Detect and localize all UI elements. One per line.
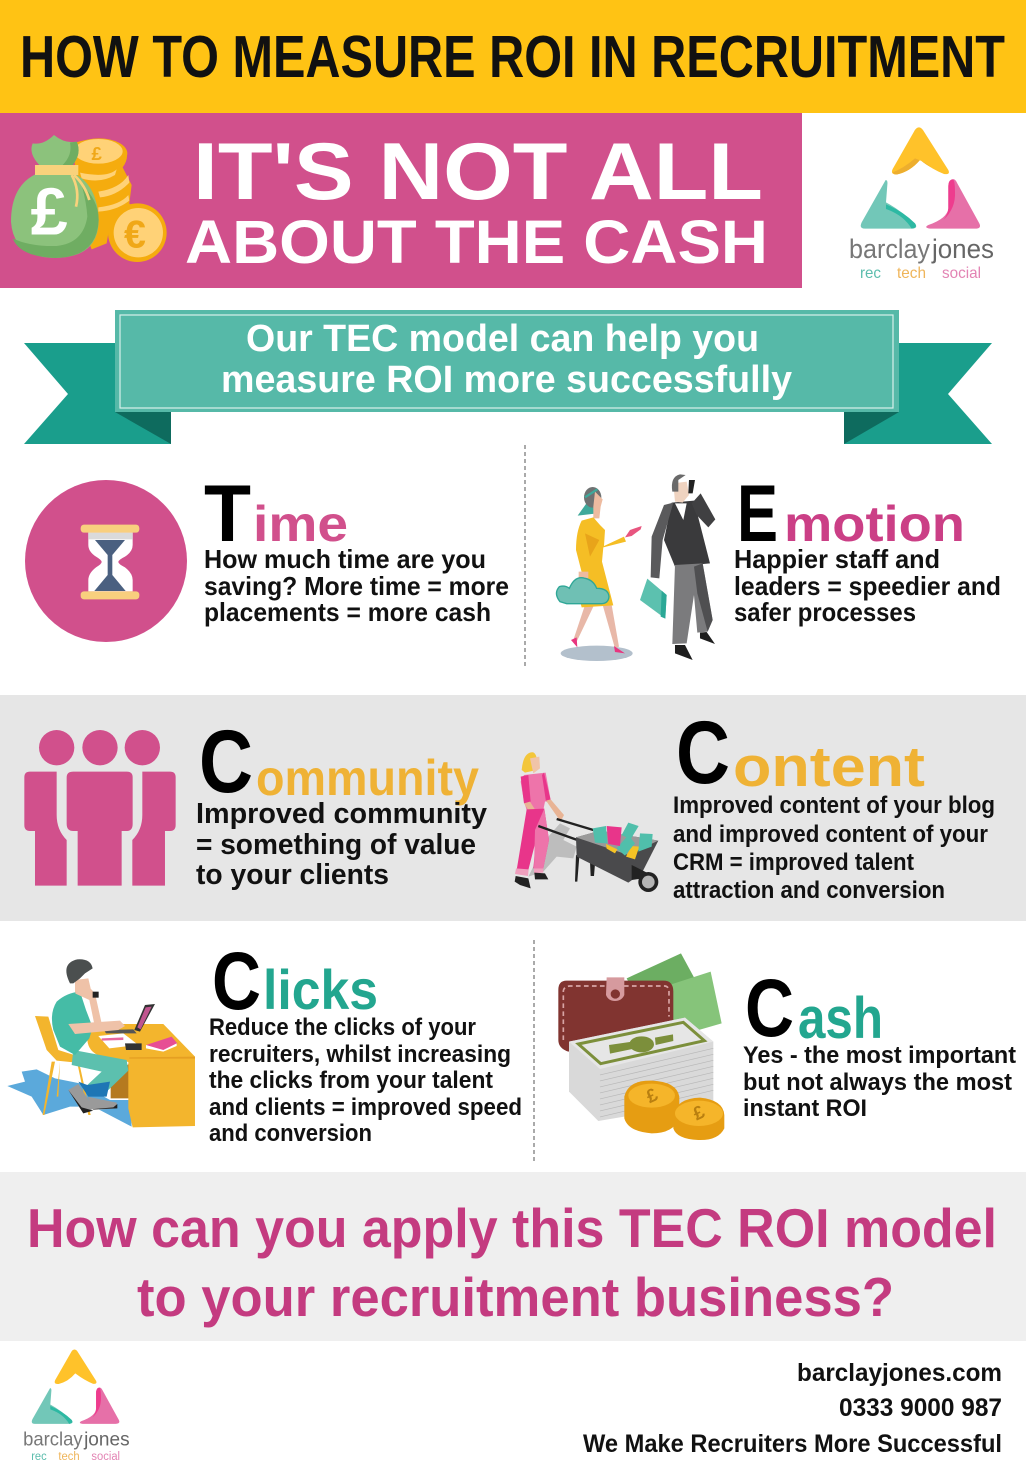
heading: clicks: licks — [263, 958, 378, 1021]
footer logo wordmark: jones — [83, 1428, 130, 1450]
footer contact details: barclayjones.com — [797, 1359, 1002, 1387]
icon: money bag and coins: € — [124, 212, 146, 256]
text: content: and improved content of your — [673, 821, 988, 848]
text: community: to your clients — [196, 859, 389, 891]
text: content: CRM = improved talent — [673, 849, 914, 876]
text: time: placements = more cash — [204, 597, 491, 627]
banner text: measure ROI more successfully — [221, 359, 792, 401]
logo wordmark: social — [942, 265, 981, 282]
text: cash — [743, 1042, 1016, 1122]
icon: hourglass — [25, 480, 187, 642]
heading: time — [204, 469, 348, 559]
footer contact details: 0333 9000 987 — [839, 1394, 1002, 1422]
call to action text: How can you apply this TEC ROI model — [27, 1197, 997, 1259]
panel: grey band — [0, 695, 1026, 921]
text: community: = something of value — [196, 829, 476, 861]
heading: emotion: motion — [784, 496, 965, 552]
panel: call to action — [0, 1172, 1026, 1341]
heading: community: ommunity — [256, 750, 479, 806]
text: clicks: Reduce the clicks of your — [209, 1014, 476, 1041]
heading: content: ontent — [733, 735, 925, 799]
text: content — [673, 792, 995, 904]
text: clicks: and clients = improved speed — [209, 1094, 522, 1121]
illustration: wallet, banknotes and coins: £ — [689, 1101, 708, 1124]
text: time — [204, 544, 509, 627]
footer logo wordmark — [23, 1428, 130, 1463]
logo wordmark: barclay — [849, 234, 930, 264]
text: time: How much time are you — [204, 544, 486, 574]
text: content: Improved content of your blog — [673, 792, 995, 819]
banner: TEC model ribbon — [24, 310, 992, 444]
illustration: wallet, banknotes and coins: £ — [643, 1083, 661, 1107]
footer logo wordmark: rec — [31, 1450, 47, 1463]
panel: community — [24, 711, 487, 891]
footer logo wordmark: barclay — [23, 1428, 83, 1450]
text: clicks: the clicks from your talent — [209, 1067, 493, 1094]
text: time: saving? More time = more — [204, 571, 509, 601]
text: clicks: recruiters, whilst increasing — [209, 1041, 511, 1068]
footer logo wordmark: social — [91, 1450, 120, 1463]
call to action text — [27, 1197, 997, 1328]
logo wordmark: tech — [897, 265, 926, 282]
heading: community: C — [199, 711, 253, 811]
heading: community — [199, 711, 479, 811]
text: emotion — [734, 544, 1001, 627]
panel: headline banner — [0, 113, 802, 288]
headline line 2: ABOUT THE CASH — [185, 208, 768, 276]
icon: three people — [24, 730, 176, 886]
footer contact details — [583, 1359, 1002, 1458]
text: emotion: leaders = speedier and — [734, 571, 1001, 601]
panel: cash — [558, 953, 1016, 1140]
panel: clicks — [7, 936, 522, 1147]
heading: clicks: C — [212, 936, 261, 1027]
heading: emotion: E — [737, 469, 778, 559]
logo: barclayjones footer — [23, 1349, 130, 1463]
heading: emotion — [737, 469, 965, 559]
heading: content — [676, 702, 925, 802]
panel: title bar — [0, 0, 1026, 113]
text: content: attraction and conversion — [673, 877, 945, 904]
illustration: wallet, banknotes and coins — [558, 953, 724, 1140]
panel: time — [25, 469, 509, 642]
banner text — [221, 318, 792, 401]
icon: money bag and coins: £ — [31, 176, 68, 250]
heading: time: T — [204, 469, 251, 559]
footer logo mark — [32, 1349, 119, 1424]
logo wordmark: rec — [860, 265, 881, 282]
icon: money bag and coins: £ — [91, 143, 102, 164]
heading: cash: C — [745, 963, 794, 1054]
text: cash: Yes - the most important — [743, 1042, 1016, 1069]
footer logo wordmark: tech — [58, 1450, 80, 1463]
logo mark — [861, 127, 980, 229]
heading: cash — [745, 963, 883, 1054]
logo wordmark: jones — [931, 234, 994, 264]
call to action text: to your recruitment business? — [137, 1266, 894, 1328]
heading: content: C — [676, 702, 730, 802]
heading: time: ime — [253, 496, 348, 552]
icon: money bag and coins — [11, 135, 167, 262]
logo: barclayjones top — [849, 127, 994, 282]
footer contact details: We Make Recruiters More Successful — [583, 1430, 1002, 1458]
illustration: person with wheelbarrow — [515, 752, 658, 892]
banner text: Our TEC model can help you — [246, 318, 759, 360]
text: cash: instant ROI — [743, 1095, 867, 1122]
illustration: person at desk — [7, 959, 195, 1127]
text: clicks: and conversion — [209, 1120, 372, 1147]
heading: clicks — [212, 936, 378, 1027]
heading: cash: ash — [798, 986, 883, 1051]
panel: content — [515, 702, 995, 904]
illustration: woman and businessman — [556, 474, 715, 661]
text: cash: but not always the most — [743, 1069, 1012, 1096]
text: community — [196, 798, 487, 891]
logo wordmark — [849, 234, 994, 282]
text: emotion: safer processes — [734, 597, 916, 627]
text: clicks — [209, 1014, 522, 1147]
text: community: Improved community — [196, 798, 487, 830]
panel: emotion — [556, 469, 1001, 661]
headline line 1: IT'S NOT ALL — [193, 127, 763, 217]
text: emotion: Happier staff and — [734, 544, 940, 574]
